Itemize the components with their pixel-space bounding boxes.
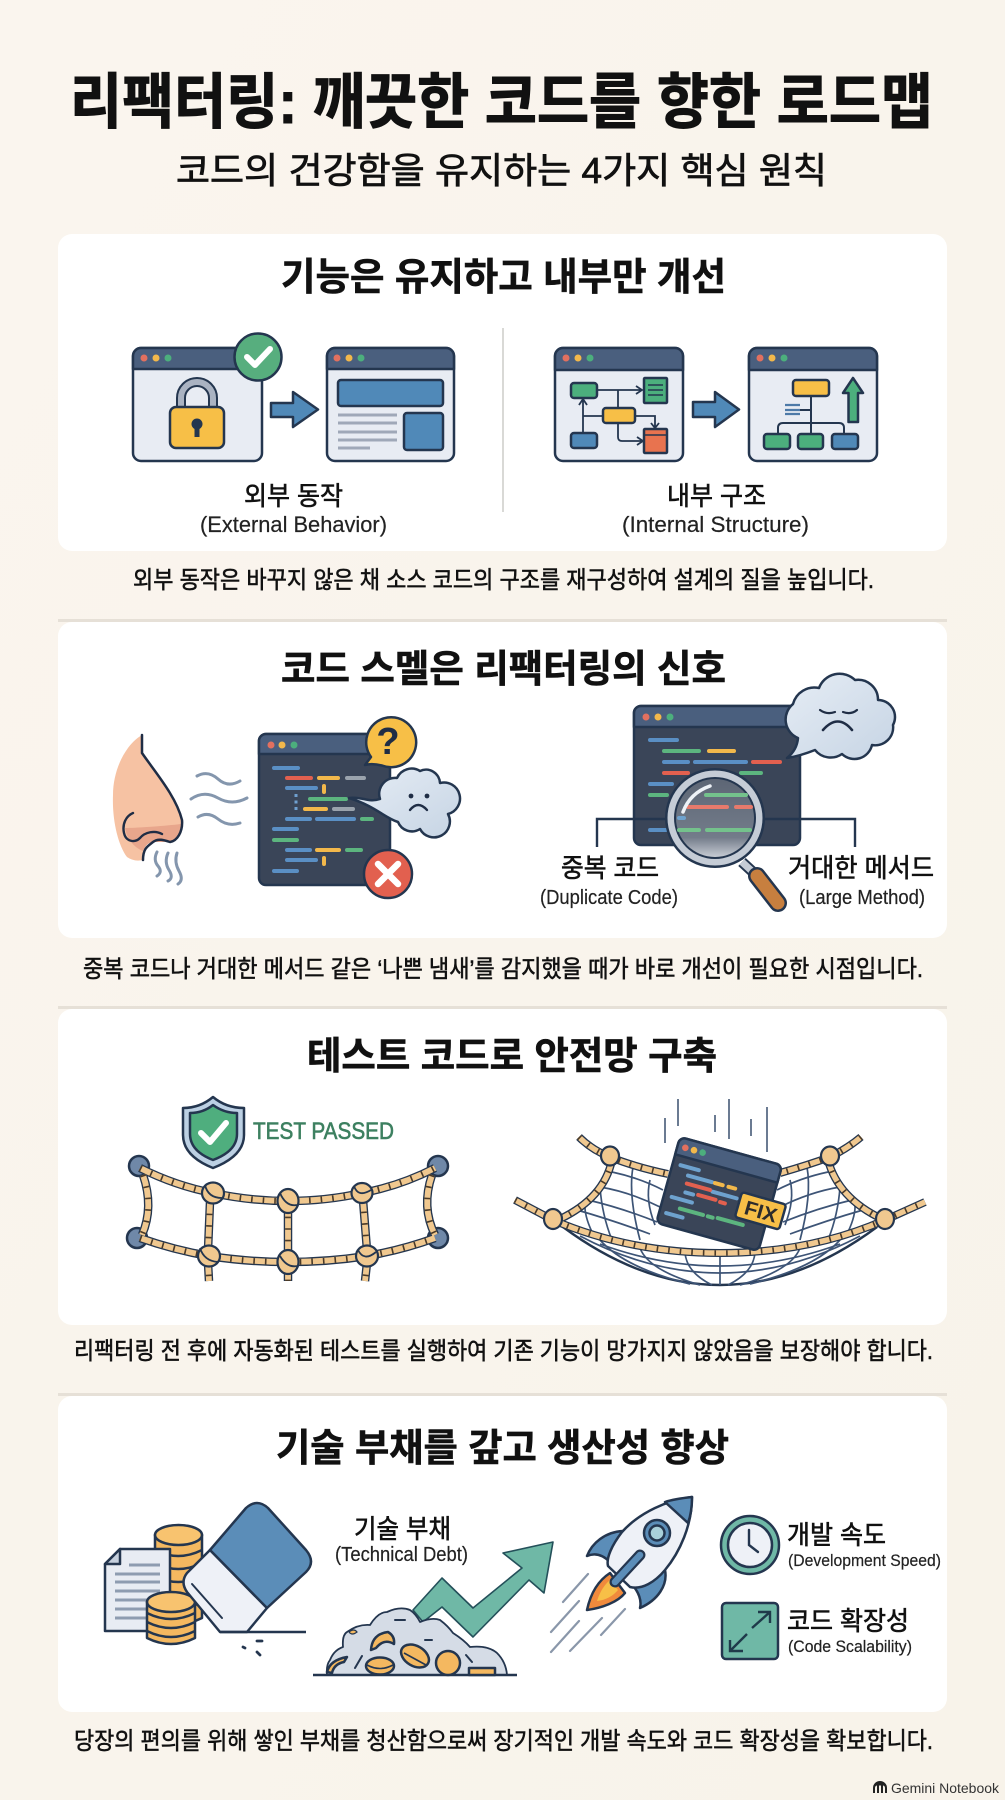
label: code scalability <box>787 1606 912 1656</box>
icon: nose <box>113 735 182 861</box>
icon: browser with lock <box>133 334 282 461</box>
label: large method: 거대한 메서드 <box>788 853 934 883</box>
panel: test safety net <box>58 1009 947 1325</box>
label: internal structure: (Internal Structure) <box>622 512 809 537</box>
icon: rocket <box>551 1497 692 1652</box>
label: development speed: 개발 속도 <box>787 1520 886 1550</box>
section rule <box>58 619 947 622</box>
heading: panel 4: 기술 부채를 갚고 생산성 향상 <box>276 1428 729 1470</box>
tilted code window <box>656 1137 782 1251</box>
section rule <box>58 1006 947 1009</box>
label: development speed <box>787 1520 941 1570</box>
label: internal structure: 내부 구조 <box>667 481 766 511</box>
label: duplicate code: (Duplicate Code) <box>540 887 678 909</box>
label: development speed: (Development Speed) <box>788 1551 941 1570</box>
label: external behavior: (External Behavior) <box>200 512 387 537</box>
title: 리팩터링: 깨끗한 코드를 향한 로드맵 <box>70 69 933 136</box>
icon: clock <box>721 1516 779 1574</box>
label: large method: (Large Method) <box>799 887 925 909</box>
label: technical debt: (Technical Debt) <box>335 1544 468 1566</box>
icon: coins behind <box>155 1525 202 1624</box>
label: test passed: TEST PASSED <box>253 1118 394 1145</box>
heading: panel 1: 기능은 유지하고 내부만 개선 <box>281 257 726 299</box>
icon: browser with layout <box>327 348 454 461</box>
icon: scalability <box>722 1603 778 1659</box>
heading: panel 3: 테스트 코드로 안전망 구축 <box>307 1036 717 1078</box>
subtitle: 코드의 건강함을 유지하는 4가지 핵심 원칙 <box>176 150 827 191</box>
caption: panel 3: 리팩터링 전 후에 자동화된 테스트를 실행하여 기존 기능이 망가지지 않았음을 보장해야 합니다. <box>74 1338 933 1365</box>
arrow: behaviour <box>271 392 318 427</box>
panel: code smell <box>58 622 947 938</box>
icon: document <box>105 1549 170 1631</box>
section rule <box>58 1393 947 1396</box>
label: code scalability: (Code Scalability) <box>788 1637 912 1656</box>
tag: FIX: FIX <box>742 1197 780 1228</box>
label: duplicate code <box>540 853 678 909</box>
icon: rising arrow <box>413 1542 553 1637</box>
icon: shield <box>183 1097 244 1168</box>
panel: behaviour preserved <box>58 234 947 551</box>
icon: browser with tangled flow <box>555 348 683 461</box>
icon: code window with magnifier <box>597 674 895 903</box>
divider <box>502 328 504 512</box>
tag: FIX <box>735 1192 786 1230</box>
icon: safety net with code <box>515 1099 925 1285</box>
panel: tech debt <box>58 1396 947 1712</box>
bracket <box>597 819 855 847</box>
icon: question bubble: ? <box>376 721 400 763</box>
label: internal structure <box>622 481 809 537</box>
label: large method <box>788 853 934 909</box>
caption: panel 2: 중복 코드나 거대한 메서드 같은 ‘나쁜 냄새’를 감지했을 때가 바로 개선이 필요한 시점입니다. <box>83 956 923 983</box>
icon: sad smell cloud <box>349 769 460 837</box>
heading: panel 2: 코드 스멜은 리팩터링의 신호 <box>281 649 726 691</box>
label: duplicate code: 중복 코드 <box>561 853 659 883</box>
caption: panel 4: 당장의 편의를 위해 쌓인 부채를 청산함으로써 장기적인 개발 속도와 코드 확장성을 확보합니다. <box>74 1728 933 1755</box>
label: technical debt <box>335 1514 468 1566</box>
falling lines <box>665 1099 767 1152</box>
icon: smell waves <box>155 774 247 884</box>
icon: browser with clean tree <box>749 348 877 461</box>
icon: rope net <box>127 1156 448 1281</box>
icon: debt pile <box>313 1608 517 1675</box>
icon: error cross <box>364 850 412 898</box>
label: code scalability: 코드 확장성 <box>787 1606 909 1636</box>
caption: panel 1: 외부 동작은 바꾸지 않은 채 소스 코드의 구조를 재구성하여 설계의 질을 높입니다. <box>133 567 874 594</box>
icon: sad cloud <box>786 674 895 759</box>
footer: Gemini Notebook: Gemini Notebook <box>891 1780 1000 1796</box>
icon: eraser <box>184 1503 311 1655</box>
icon: magnifier <box>665 768 778 903</box>
arrow: structure <box>693 392 739 427</box>
icon: coins in front <box>147 1592 195 1644</box>
icon: code window with smell <box>259 717 460 898</box>
label: technical debt: 기술 부채 <box>354 1514 451 1544</box>
label: external behavior: 외부 동작 <box>244 481 343 511</box>
label: external behavior <box>200 481 387 537</box>
icon: question bubble <box>365 717 416 767</box>
